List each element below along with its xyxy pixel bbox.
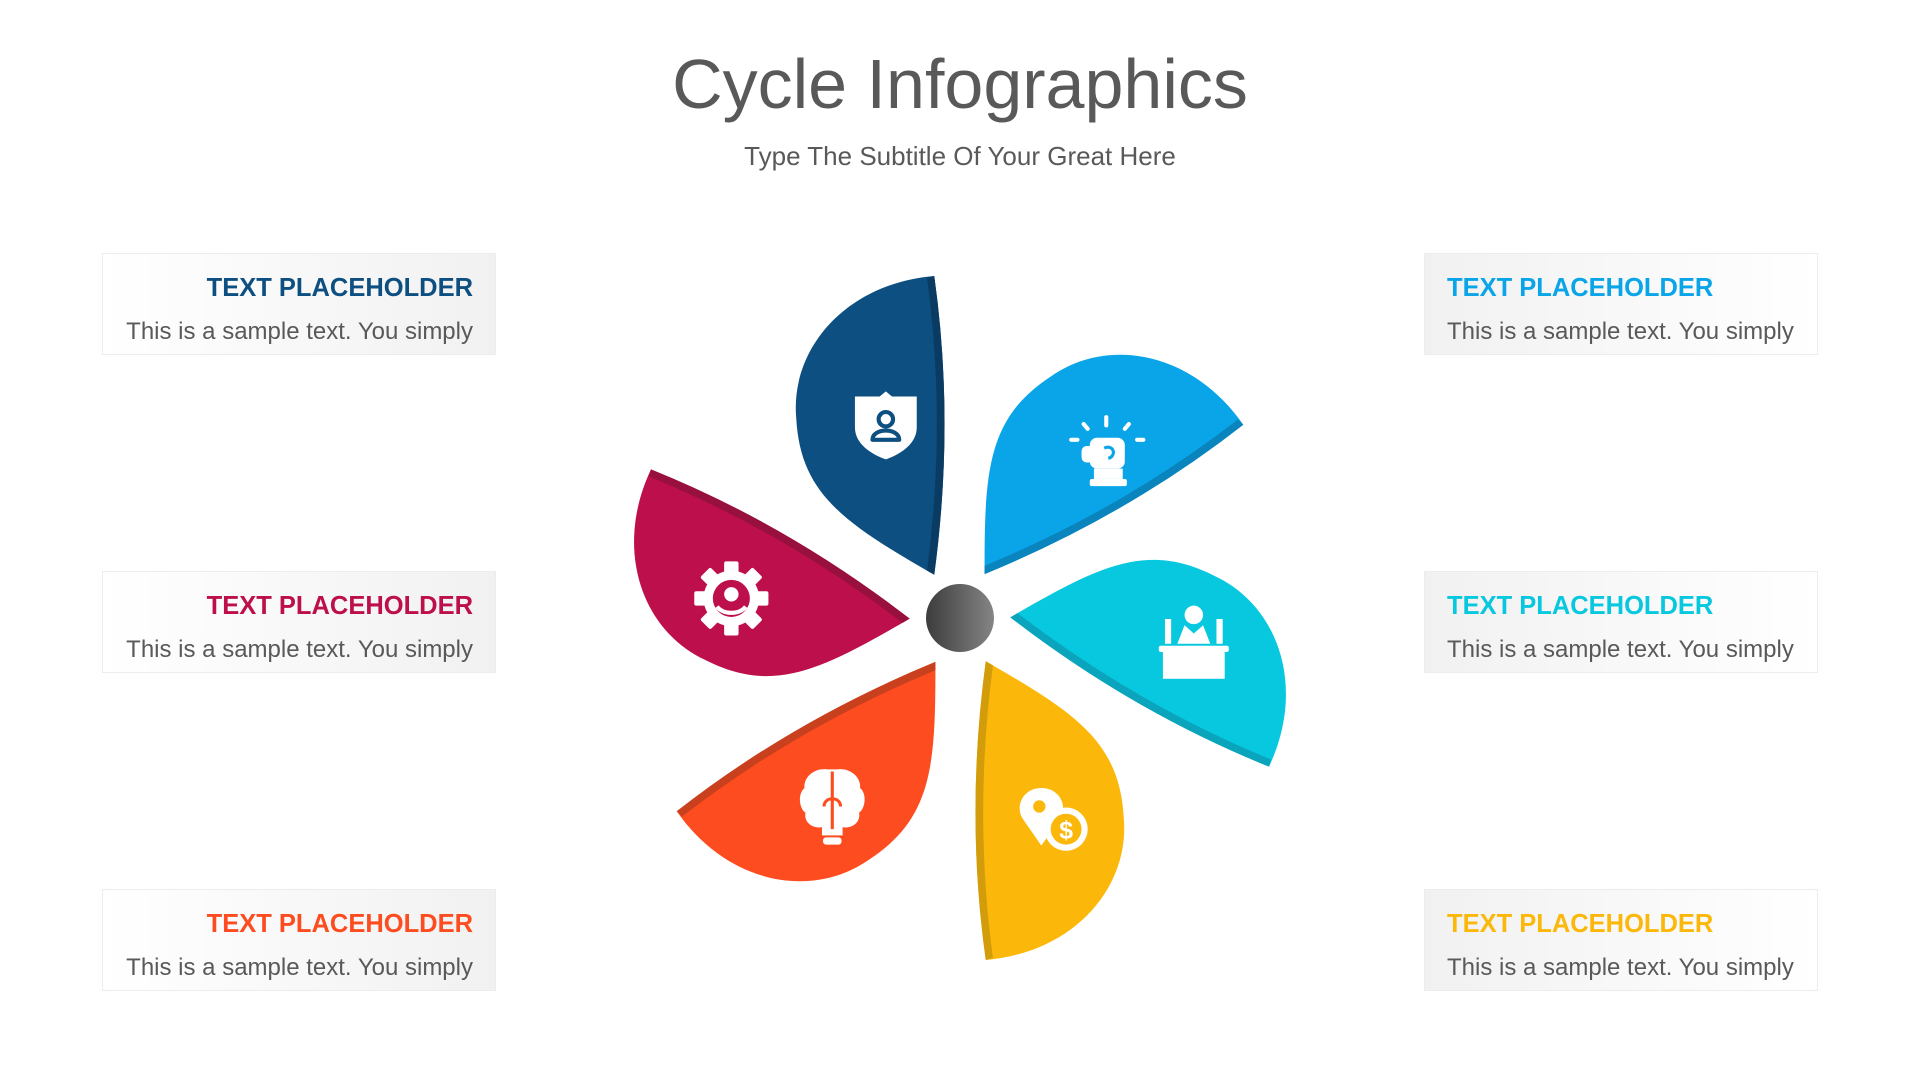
text box: right middle: TEXT PLACEHOLDER <box>1447 592 1713 620</box>
subtitle: Type The Subtitle Of Your Great Here <box>744 141 1176 171</box>
icon: gear with person <box>694 561 768 636</box>
petal: yellow <box>975 661 1124 960</box>
text box: left bottom: TEXT PLACEHOLDER <box>207 910 473 938</box>
icon: shield with person <box>855 391 917 459</box>
text box: left middle: TEXT PLACEHOLDER <box>207 592 473 620</box>
text box: right bottom: TEXT PLACEHOLDER <box>1447 910 1713 938</box>
text box: right middle <box>1424 571 1818 673</box>
petal: crimson <box>582 460 915 739</box>
text box: right top <box>1424 253 1818 355</box>
text box: left top: This is a sample text. You simply <box>126 318 473 345</box>
petal: light blue <box>915 305 1248 583</box>
text box: right top: TEXT PLACEHOLDER <box>1447 274 1713 302</box>
text box: right middle: This is a sample text. You simply <box>1447 636 1794 663</box>
icon: fist with rays <box>1069 415 1145 486</box>
petal: dark blue <box>796 276 945 575</box>
text box: left top: TEXT PLACEHOLDER <box>207 274 473 302</box>
text box: left top <box>102 253 496 355</box>
icon: brain bulb <box>800 769 865 845</box>
icon: location pin with dollar <box>1020 788 1088 851</box>
center circle <box>926 584 994 652</box>
icon: location pin with dollar: $ <box>1059 817 1073 844</box>
text box: left middle <box>102 571 496 673</box>
icon: podium speaker <box>1159 606 1229 679</box>
text box: left bottom: This is a sample text. You simply <box>126 954 473 981</box>
title: Cycle Infographics <box>672 45 1248 123</box>
text box: left middle: This is a sample text. You simply <box>126 636 473 663</box>
petal: orange <box>672 653 1005 931</box>
petal: cyan <box>1005 497 1338 776</box>
text box: right bottom <box>1424 889 1818 991</box>
text box: right bottom: This is a sample text. You simply <box>1447 954 1794 981</box>
text box: left bottom <box>102 889 496 991</box>
text box: right top: This is a sample text. You simply <box>1447 318 1794 345</box>
